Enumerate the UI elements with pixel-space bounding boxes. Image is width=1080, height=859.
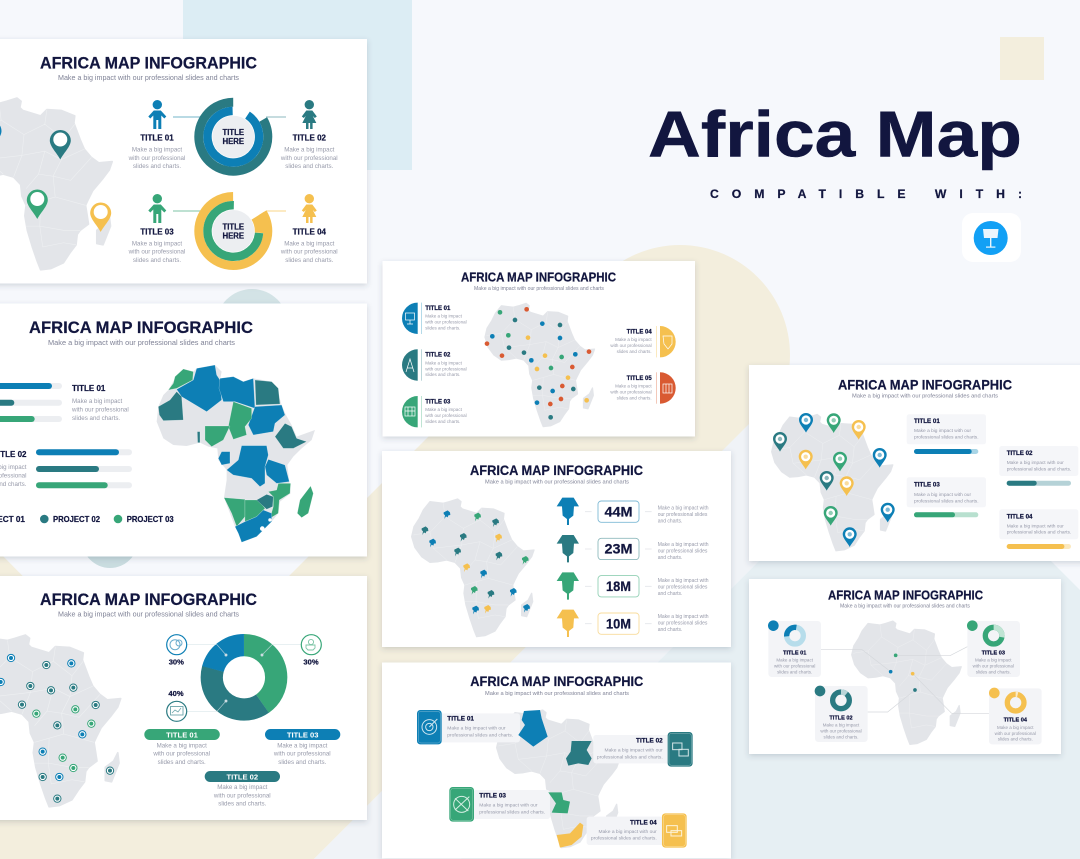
- panel title: AFRICA MAP INFOGRAPHIC: [461, 271, 616, 285]
- text: title 02: slides and charts.: [823, 734, 859, 740]
- text: title 04: professional slides and charts.: [591, 836, 657, 842]
- text: title 01: with our professional: [774, 664, 815, 669]
- stat descriptions: and charts.: [658, 555, 682, 561]
- badge: title 05: Make a big impact: [615, 384, 652, 389]
- card: title 03: Make a big impact with our: [914, 492, 971, 498]
- text: title 04: TITLE 04: [630, 819, 657, 826]
- africa map: [772, 414, 893, 551]
- pill: title 01: Make a big impact: [157, 742, 207, 749]
- text: title 02: TITLE 02: [293, 134, 327, 143]
- stat: 23M: [598, 538, 639, 560]
- panel title: AFRICA MAP INFOGRAPHIC: [838, 377, 1012, 392]
- badge: title 02: slides and charts.: [425, 372, 460, 377]
- stat: 44M: [598, 501, 639, 522]
- panel: pushpins: [382, 451, 731, 647]
- panel title: AFRICA MAP INFOGRAPHIC: [470, 463, 643, 478]
- pill: title 02: Make a big impact: [217, 784, 268, 791]
- card: title 01: Make a big impact with our: [914, 428, 971, 434]
- text: title 04: TITLE 04: [1004, 718, 1028, 724]
- text: title 01: TITLE 01: [140, 134, 174, 143]
- connector lines: [187, 645, 301, 711]
- icon: blue circle: [167, 635, 187, 655]
- badge: title 04: [610, 326, 676, 357]
- stat: 10M: 10M: [606, 615, 631, 631]
- text: title 04: TITLE 04: [293, 228, 327, 237]
- main title: Africa Map: [648, 98, 1022, 170]
- text: title 01: [71, 384, 129, 422]
- badge: title 03: with our professional: [425, 413, 467, 418]
- africa map with coloured countries: [157, 365, 315, 542]
- text: title 03: slides and charts.: [133, 257, 181, 264]
- card: title 03: TITLE 03: [914, 482, 940, 489]
- stat descriptions: our professional slides: [658, 620, 708, 626]
- text: title 01: slides and charts.: [777, 670, 812, 675]
- pill: title 01: [144, 729, 220, 766]
- text: title 01: [447, 716, 513, 738]
- badge: title 01: [402, 303, 467, 334]
- text: title 01: with our professional: [71, 406, 129, 414]
- text: title 04: Make a big impact: [284, 240, 335, 247]
- text: title 03: TITLE 03: [982, 650, 1005, 656]
- panel subtitle: Make a big impact with our professional slides and charts: [840, 604, 970, 610]
- panel: coloured dots map: [382, 261, 695, 436]
- text: title 02: Make a big impact: [823, 723, 860, 728]
- text: title 01: [128, 134, 185, 170]
- percentage labels: [168, 658, 319, 698]
- panel subtitle: Make a big impact with our professional slides and charts: [485, 480, 629, 486]
- badge: title 01: slides and charts.: [425, 326, 460, 330]
- card: title 04: TITLE 04: [1007, 513, 1033, 520]
- stat: 23M: 23M: [604, 541, 632, 557]
- donut: title here 1: TITLE: [222, 128, 244, 137]
- text: title 04: slides and charts.: [998, 737, 1033, 742]
- panel subtitle: Make a big impact with our professional slides and charts: [852, 394, 998, 400]
- panel title: AFRICA MAP INFOGRAPHIC: [40, 54, 257, 72]
- map markers: [0, 654, 114, 802]
- map pins: [773, 413, 895, 547]
- donut: title here 2: TITLE: [222, 222, 244, 231]
- text: title 02: with our professional: [280, 155, 338, 162]
- legend: PROJECT 03: [127, 515, 174, 524]
- stat descriptions: [658, 506, 709, 633]
- percentage labels: 30%: [303, 658, 319, 667]
- card: title 02: Make a big impact with our: [1007, 460, 1064, 466]
- text: title 03: Make a big impact: [975, 658, 1012, 663]
- panel title: AFRICA MAP INFOGRAPHIC: [470, 674, 643, 689]
- text: title 02: [597, 738, 663, 760]
- badge: title 01: Make a big impact: [425, 314, 463, 319]
- pill: title 02: [205, 771, 280, 808]
- badge: title 02: TITLE 02: [425, 353, 451, 359]
- badge: title 01: with our professional: [425, 320, 467, 325]
- pill: title 03: with our professional: [273, 751, 331, 758]
- text: title 03: with our professional: [128, 249, 185, 256]
- connector lines: [173, 117, 286, 211]
- badge: title 02: with our professional: [425, 366, 467, 371]
- panel subtitle: Make a big impact with our professional slides and charts: [474, 286, 604, 292]
- text: title 02: professional slides and charts.: [597, 754, 663, 760]
- text: title 01: professional slides and charts.: [447, 732, 513, 738]
- panel: highlighted countries: [382, 662, 731, 858]
- donut: title here 1: HERE: [222, 137, 244, 146]
- text: title 01: TITLE 01: [447, 716, 474, 723]
- pill: title 02: slides and charts.: [218, 801, 267, 808]
- icon: boy green: [148, 194, 166, 223]
- text: title 04: [995, 718, 1036, 742]
- pill: title 03: slides and charts.: [278, 759, 327, 766]
- panel title: AFRICA MAP INFOGRAPHIC: [29, 318, 253, 337]
- compatible with label: COMPATIBLE WITH:: [710, 187, 1022, 201]
- text: title 03: [128, 228, 185, 264]
- panel subtitle: Make a big impact with our professional slides and charts: [48, 338, 235, 347]
- badge: title 03: slides and charts.: [425, 419, 460, 424]
- text: title 01: [774, 650, 815, 675]
- card: title 04: [999, 509, 1078, 549]
- africa map: [412, 499, 534, 637]
- text: title 02: with our professional: [820, 729, 862, 734]
- text: title 03: [973, 650, 1014, 675]
- text: title 03: [479, 793, 545, 815]
- badge: title 05: with our professional: [610, 390, 652, 395]
- stat descriptions: our professional slides: [658, 512, 708, 518]
- pill: title 01: slides and charts.: [158, 759, 206, 766]
- stat: 10M: [598, 613, 639, 634]
- text: title 02: Make a big impact: [284, 146, 335, 154]
- text: title 04: Make a big impact with our: [599, 829, 657, 835]
- text: title 02: TITLE 02: [636, 738, 663, 745]
- pill: title 02: TITLE 02: [226, 773, 258, 782]
- panel title: AFRICA MAP INFOGRAPHIC: [40, 591, 257, 609]
- pill: title 01: TITLE 01: [166, 731, 199, 740]
- donut chart: [199, 632, 289, 722]
- panel: coloured country map with bars: [0, 304, 367, 556]
- badge: title 04: TITLE 04: [627, 329, 652, 335]
- pill: title 02: with our professional: [213, 793, 271, 800]
- donut: title here 1: [186, 90, 280, 184]
- pill: title 03: Make a big impact: [277, 742, 328, 749]
- map, cards and donuts: [768, 620, 1042, 744]
- percentage labels: 40%: [168, 689, 184, 698]
- panel subtitle: Make a big impact with our professional slides and charts: [58, 73, 239, 82]
- donut: title here 2: HERE: [222, 231, 244, 240]
- text: title 02: TITLE 02: [829, 716, 853, 722]
- stat descriptions: Make a big impact with: [658, 542, 709, 548]
- card: title 01: professional slides and charts.: [914, 434, 979, 440]
- text: title 01: TITLE 01: [72, 384, 106, 393]
- text: title 03: TITLE 03: [479, 793, 506, 800]
- pill: title 01: with our professional: [152, 751, 210, 758]
- icon: girl yellow: [302, 194, 317, 223]
- africa map: [485, 303, 595, 427]
- card: title 01: TITLE 01: [914, 418, 940, 425]
- text: title 02: Make a big impact with our: [605, 748, 663, 754]
- text: title 01: slides and charts.: [72, 415, 120, 422]
- badge: title 05: slides and charts.: [617, 396, 652, 400]
- badge: title 05: [610, 372, 676, 404]
- stat: 18M: 18M: [606, 578, 631, 594]
- badge: title 03: Make a big impact: [425, 407, 463, 412]
- card: title 04: Make a big impact with our: [1007, 523, 1064, 529]
- badge: title 02: [402, 349, 467, 381]
- bar group 1: [0, 383, 62, 422]
- africa map: [0, 98, 112, 270]
- stat descriptions: our professional slides: [658, 548, 708, 554]
- stat descriptions: and charts.: [658, 627, 682, 633]
- stat descriptions: Make a big impact with: [658, 578, 709, 584]
- text: title 01: with our professional: [128, 155, 185, 162]
- badge: title 04: slides and charts.: [617, 349, 652, 354]
- donut: title here 2: [186, 183, 281, 279]
- icon: boy blue: [148, 100, 166, 129]
- text: title 02: [0, 450, 27, 488]
- text: title 04: with our professional: [280, 249, 338, 256]
- text: title 03: Make a big impact with our: [479, 803, 538, 809]
- card: title 02: TITLE 02: [1007, 450, 1033, 457]
- text: title 04: slides and charts.: [285, 257, 334, 264]
- text: title 01: Make a big impact: [72, 398, 122, 405]
- big pins: [557, 498, 652, 637]
- africa map: [0, 635, 121, 807]
- badge: title 03: [402, 396, 467, 427]
- stat descriptions: and charts.: [658, 591, 682, 597]
- panel subtitle: Make a big impact with our professional slides and charts: [485, 691, 629, 697]
- icon: girl teal: [302, 100, 317, 129]
- text: title 02: slides and charts.: [285, 163, 334, 170]
- card: title 01: [907, 414, 986, 454]
- stat descriptions: and charts.: [658, 518, 682, 524]
- text: title 04: [591, 819, 657, 842]
- small tacks on map: [422, 510, 530, 614]
- badge: title 03: TITLE 03: [425, 399, 451, 405]
- stat descriptions: Make a big impact with: [658, 506, 709, 512]
- panel title: AFRICA MAP INFOGRAPHIC: [828, 588, 983, 602]
- badge: title 04: with our professional: [610, 343, 652, 348]
- card: title 04: professional slides and charts.: [1007, 530, 1071, 536]
- icon: teal circle: [167, 701, 187, 721]
- icon: green circle: [301, 635, 321, 655]
- panel: gender donuts: [0, 39, 367, 284]
- badge: title 01: TITLE 01: [425, 306, 451, 312]
- text: title 04: with our professional: [995, 731, 1036, 736]
- text: title 01: Make a big impact with our: [447, 726, 506, 732]
- legend: [0, 515, 174, 524]
- text: title 02: [280, 134, 338, 170]
- stat: 18M: [598, 576, 639, 597]
- panel: dotted map with donut: [0, 576, 367, 820]
- pill: title 03: TITLE 03: [287, 731, 319, 740]
- badge: title 05: TITLE 05: [627, 376, 652, 382]
- text: title 04: [280, 228, 338, 264]
- panel: map pins with progress bars: [749, 365, 1080, 561]
- card: title 03: professional slides and charts.: [914, 498, 979, 504]
- legend: PROJECT 02: [53, 515, 100, 524]
- bar group 2: [36, 449, 132, 488]
- map with cards and icons: [417, 710, 693, 848]
- card: title 02: professional slides and charts.: [1007, 466, 1071, 472]
- text: title 01: Make a big impact: [132, 146, 182, 154]
- panel: map with mini donuts: [749, 579, 1061, 754]
- card: title 03: [907, 477, 986, 517]
- card: title 02: [999, 446, 1078, 486]
- text: title 01: TITLE 01: [783, 650, 806, 656]
- badge: title 04: Make a big impact: [615, 337, 652, 342]
- icon: keynote: [962, 213, 1021, 262]
- text: title 01: slides and charts.: [133, 163, 181, 170]
- text: title 03: professional slides and charts.: [479, 809, 545, 815]
- stat descriptions: Make a big impact with: [658, 614, 709, 620]
- text: title 03: with our professional: [973, 664, 1014, 669]
- text: title 02: [820, 716, 862, 740]
- stat: 44M: 44M: [604, 503, 632, 519]
- text: title 04: Make a big impact: [997, 725, 1034, 730]
- panel subtitle: Make a big impact with our professional slides and charts: [58, 610, 239, 619]
- text: title 01: Make a big impact: [776, 658, 814, 663]
- percentage labels: 30%: [169, 658, 184, 667]
- text: title 03: Make a big impact: [132, 240, 182, 247]
- map pins: [0, 120, 111, 232]
- text: title 03: TITLE 03: [140, 228, 174, 237]
- map dots: [485, 307, 591, 420]
- stat descriptions: our professional slides: [658, 584, 708, 590]
- text: title 03: slides and charts.: [976, 670, 1011, 675]
- badge: title 02: Make a big impact: [425, 360, 463, 365]
- pill: title 03: [265, 729, 340, 766]
